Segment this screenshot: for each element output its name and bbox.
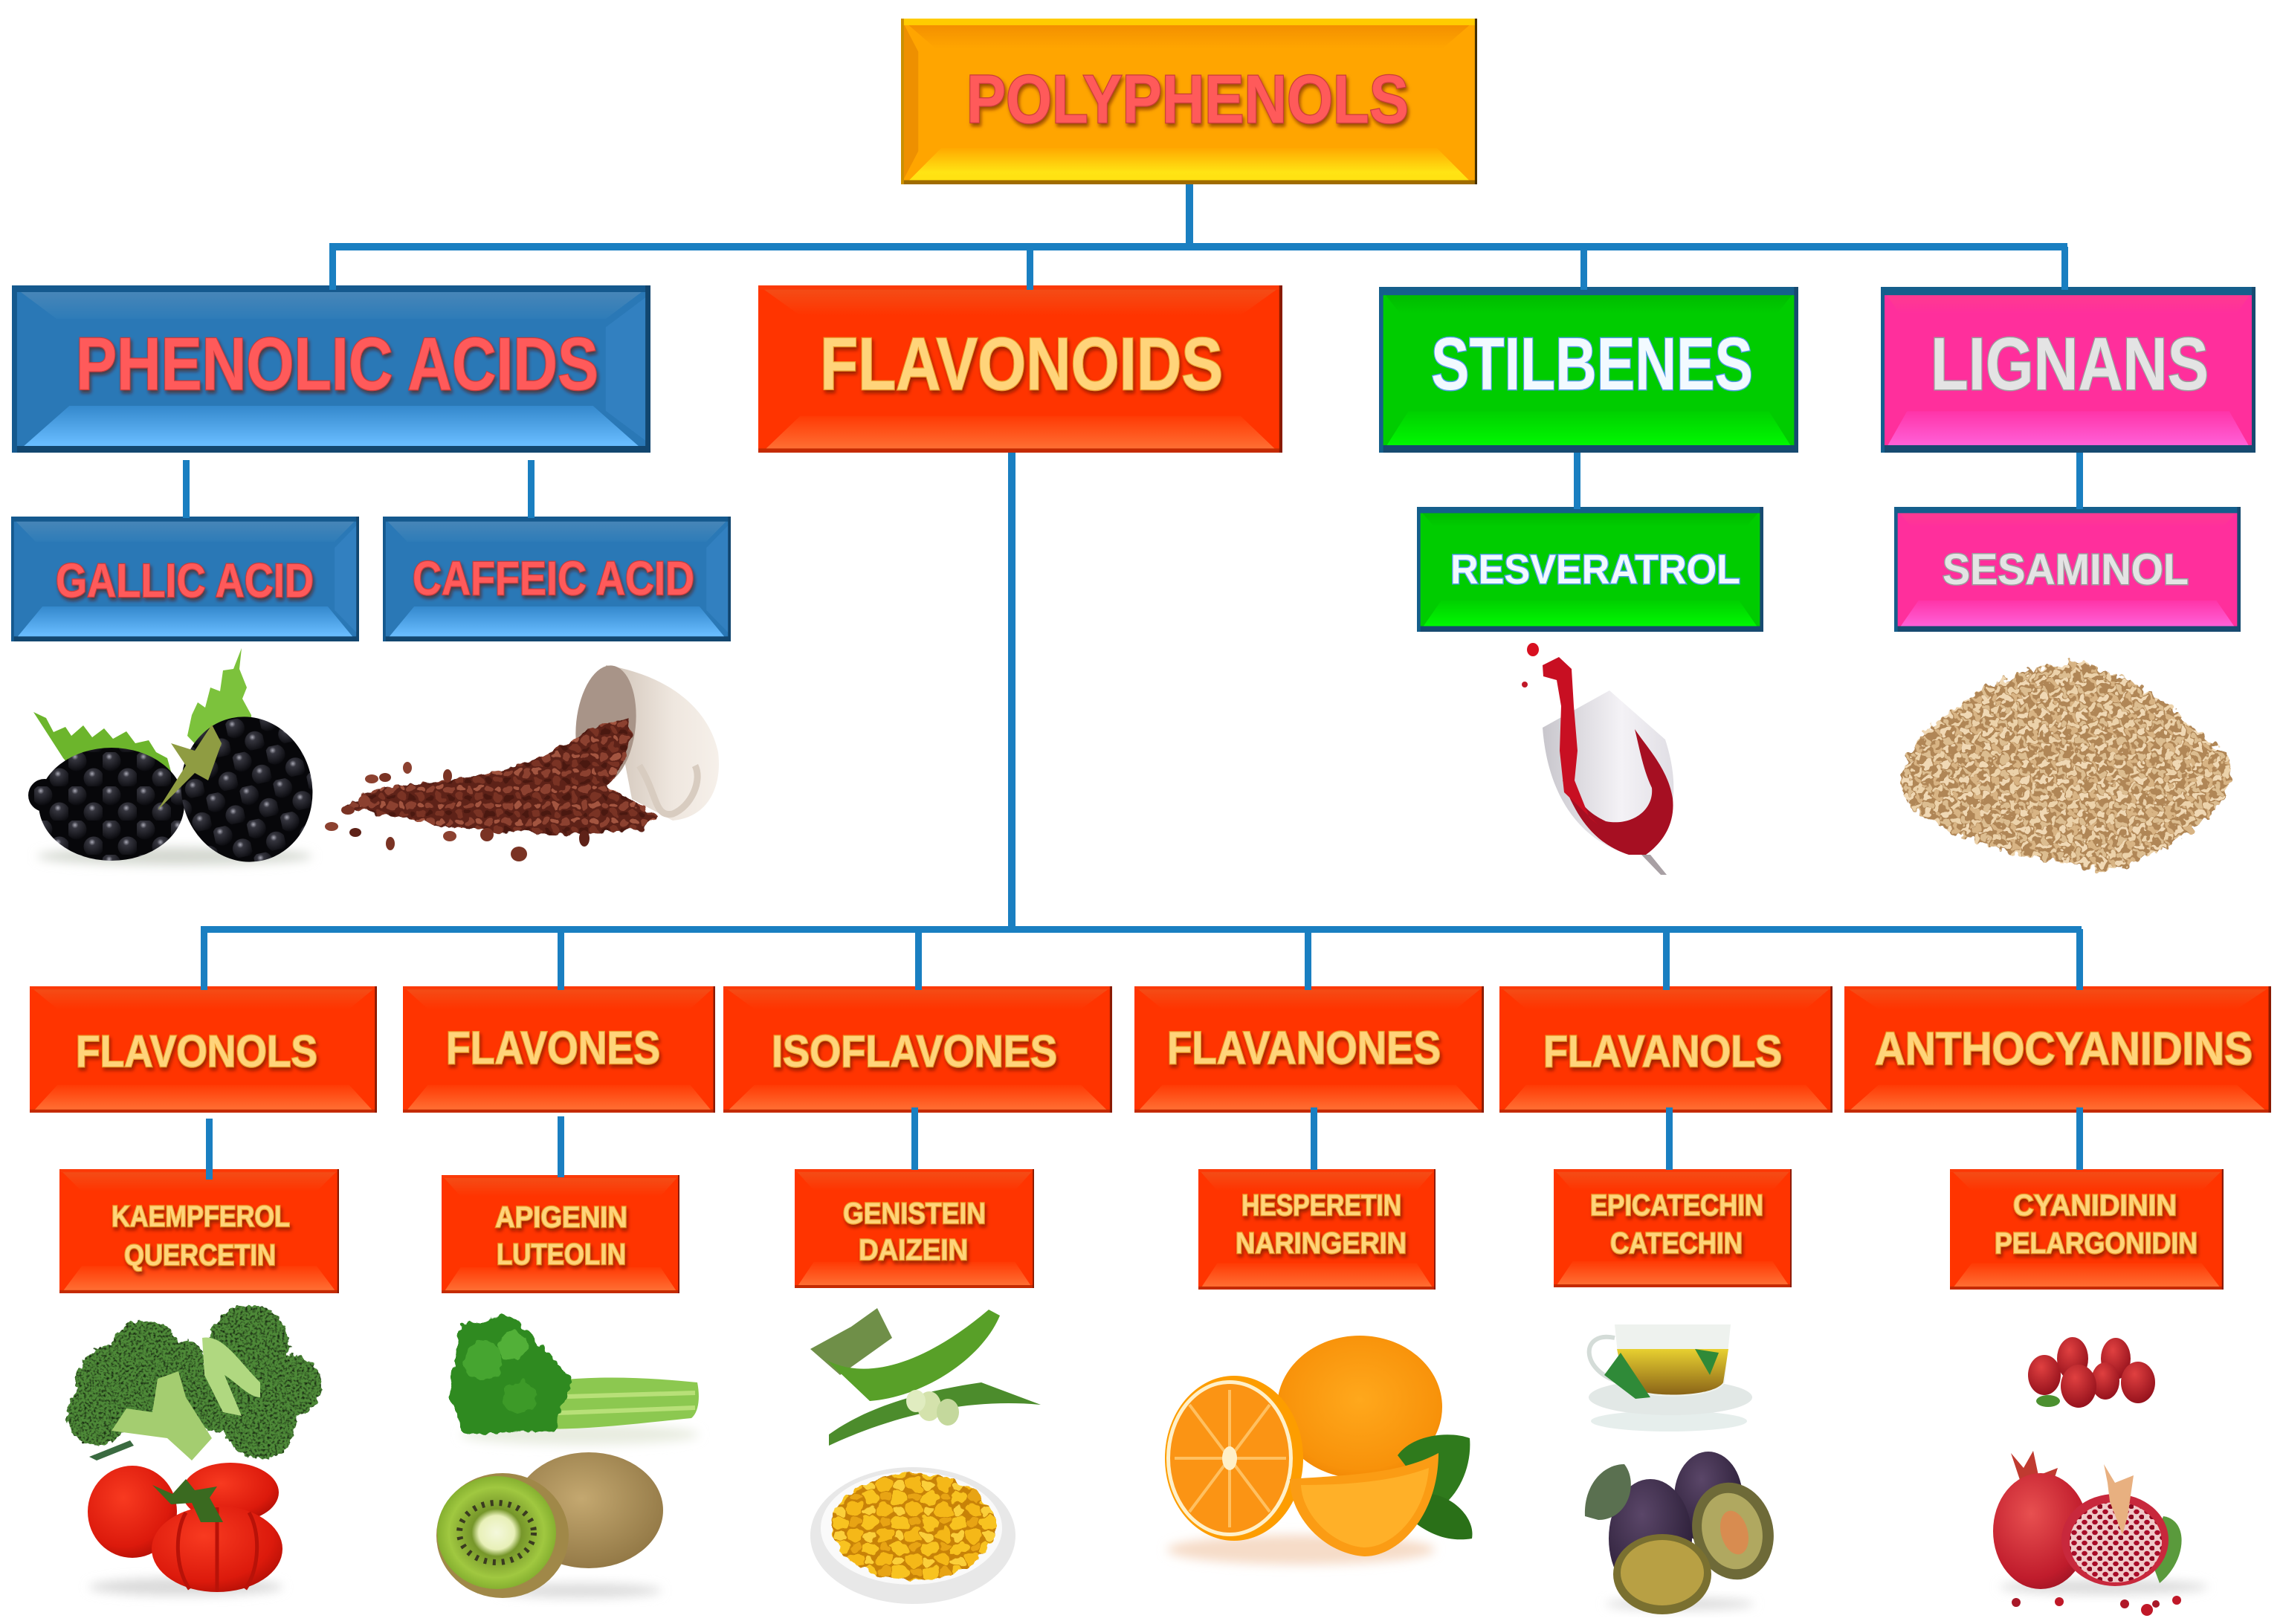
box: apigenin luteolin (442, 1175, 679, 1293)
box: epicatechin catechin: EPICATECHIN (1590, 1189, 1763, 1222)
box: flavanones: FLAVANONES (1167, 1023, 1441, 1074)
box: epicatechin catechin: CATECHIN (1610, 1227, 1743, 1260)
box: flavones: FLAVONES (446, 1023, 660, 1074)
image: coffee beans and cup (325, 662, 719, 861)
box: flavanones (1134, 986, 1484, 1113)
box: stilbenes (1379, 287, 1798, 453)
image: green tea (1589, 1324, 1752, 1431)
image: celery (450, 1314, 699, 1445)
image: sesame seeds (1902, 662, 2232, 871)
box: anthocyanidins (1844, 986, 2271, 1113)
box: hesperetin naringerin: NARINGERIN (1236, 1227, 1407, 1260)
image: broccoli (67, 1305, 321, 1460)
box: flavonoids: FLAVONOIDS (820, 323, 1223, 406)
box: lignans (1881, 287, 2255, 453)
box: apigenin luteolin: LUTEOLIN (497, 1238, 626, 1271)
box: gallic acid: GALLIC ACID (56, 554, 314, 607)
box: flavonoids (758, 285, 1282, 453)
box: resveratrol: RESVERATROL (1450, 546, 1740, 592)
box: genistein daizein (795, 1169, 1034, 1288)
box: sesaminol: SESAMINOL (1943, 546, 2189, 594)
box: cyanidinin pelargonidin (1950, 1169, 2224, 1290)
box: lignans: LIGNANS (1931, 323, 2209, 406)
box: polyphenols: POLYPHENOLS (966, 62, 1409, 138)
box: flavonols: FLAVONOLS (76, 1026, 317, 1076)
box: genistein daizein: GENISTEIN (843, 1197, 986, 1230)
box: gallic acid (11, 517, 359, 641)
box: cyanidinin pelargonidin: CYANIDININ (2013, 1189, 2177, 1222)
box: flavones (403, 986, 715, 1113)
box: cyanidinin pelargonidin: PELARGONIDIN (1995, 1227, 2198, 1260)
box: sesaminol (1894, 507, 2241, 632)
image: wine glass (1522, 643, 1673, 875)
image: red berries (2028, 1337, 2155, 1408)
box: flavanols (1499, 986, 1832, 1113)
box: kaempferol quercetin (59, 1169, 339, 1293)
connector lines (183, 184, 2083, 1180)
box: resveratrol (1417, 507, 1763, 632)
box: apigenin luteolin: APIGENIN (495, 1201, 627, 1234)
box: anthocyanidins: ANTHOCYANIDINS (1875, 1023, 2253, 1075)
box: epicatechin catechin (1554, 1169, 1792, 1287)
box: isoflavones (723, 986, 1112, 1113)
image: kiwi (436, 1452, 663, 1598)
box: genistein daizein: DAIZEIN (859, 1234, 968, 1266)
box: caffeic acid: CAFFEIC ACID (413, 551, 694, 605)
image: plate of yellow beans (810, 1467, 1015, 1604)
box: stilbenes: STILBENES (1431, 323, 1753, 406)
image: blackberries (28, 648, 326, 874)
box: caffeic acid (383, 517, 731, 641)
box: phenolic acids (12, 285, 650, 453)
box: polyphenols (901, 19, 1477, 184)
image: oranges (1165, 1336, 1472, 1565)
box: flavanols: FLAVANOLS (1543, 1026, 1782, 1076)
image: pomegranate (1993, 1451, 2208, 1616)
box: hesperetin naringerin (1198, 1169, 1436, 1290)
box: phenolic acids: PHENOLIC ACIDS (76, 323, 598, 406)
box: hesperetin naringerin: HESPERETIN (1241, 1189, 1401, 1222)
box: kaempferol quercetin: QUERCETIN (124, 1239, 276, 1272)
image: plums (1585, 1452, 1784, 1614)
image: tomatoes (88, 1463, 282, 1596)
box: kaempferol quercetin: KAEMPFEROL (112, 1200, 290, 1233)
box: isoflavones: ISOFLAVONES (772, 1026, 1057, 1076)
box: flavonols (30, 986, 377, 1113)
image: fava beans (810, 1308, 1041, 1446)
